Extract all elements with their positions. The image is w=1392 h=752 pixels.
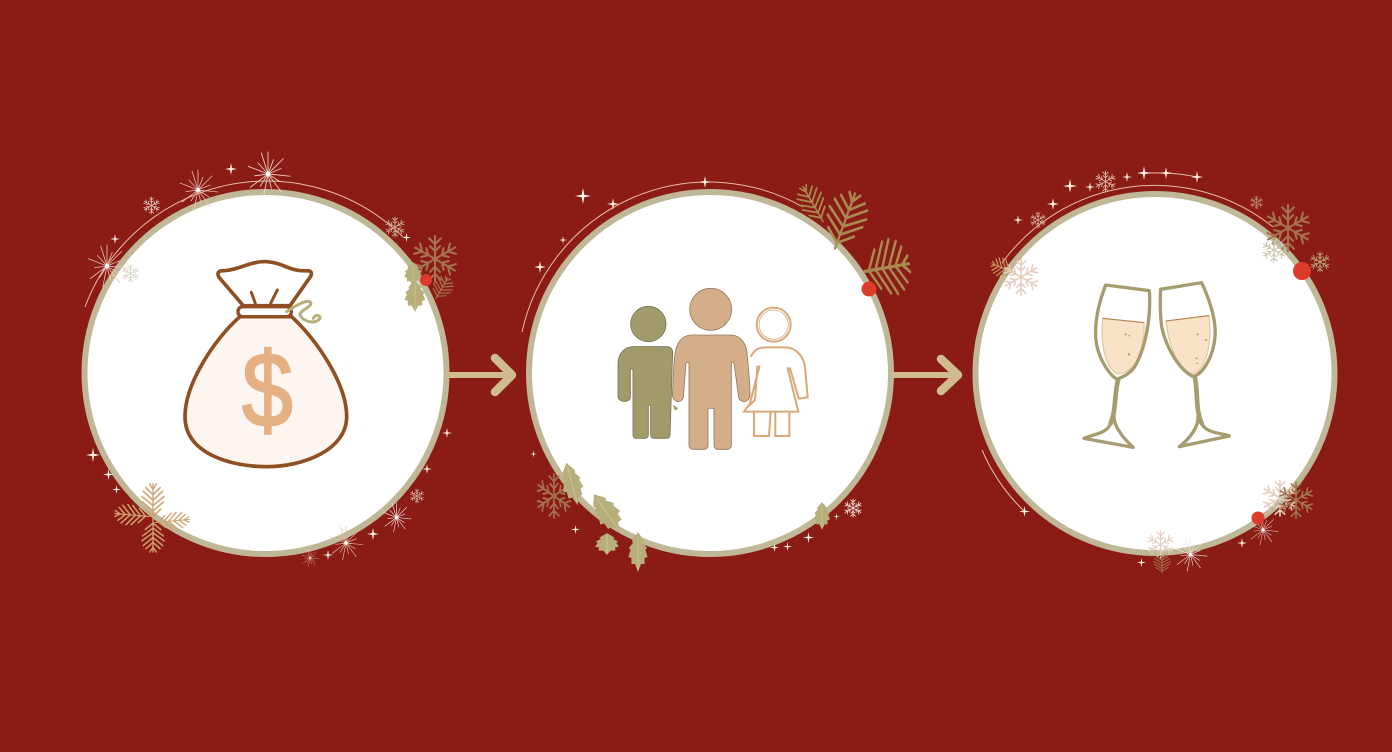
- left wine: [1102, 318, 1144, 374]
- dollar sign: $: [242, 331, 293, 449]
- ring and disc 3: [976, 194, 1334, 553]
- wine surface lines: [1103, 316, 1209, 323]
- right figure: [744, 308, 808, 436]
- left figure: [618, 306, 673, 438]
- decorative arc 2: [522, 182, 803, 332]
- arrow: family to celebration: [894, 359, 958, 391]
- hand detail: [673, 404, 678, 411]
- left glass: [1084, 285, 1150, 447]
- bag ties: [251, 290, 277, 303]
- winter decorations 2: [530, 176, 914, 572]
- bag neck: [218, 262, 311, 306]
- right wine: [1166, 316, 1210, 374]
- icon: champagne glasses: [1084, 283, 1229, 447]
- bag body: [185, 317, 347, 467]
- bubbles: [1125, 333, 1207, 364]
- panel: money bag circle: [84, 152, 458, 567]
- decorative arcs 3: [982, 173, 1273, 512]
- panel: celebration circle: [976, 166, 1334, 573]
- panel: family circle: [522, 176, 914, 572]
- ring and disc 1: [84, 192, 446, 554]
- winter decorations 1: [86, 152, 458, 567]
- arrow: money to family: [449, 358, 512, 392]
- icon: money bag: [185, 262, 347, 467]
- centre figure: [672, 288, 750, 449]
- bag band: [238, 307, 291, 317]
- icon: family: [618, 288, 808, 449]
- decorative arc 1: [85, 181, 403, 307]
- winter decorations 3: [989, 166, 1330, 573]
- bag cord: [287, 301, 320, 322]
- right glass: [1160, 283, 1229, 447]
- ring and disc 2: [529, 192, 891, 554]
